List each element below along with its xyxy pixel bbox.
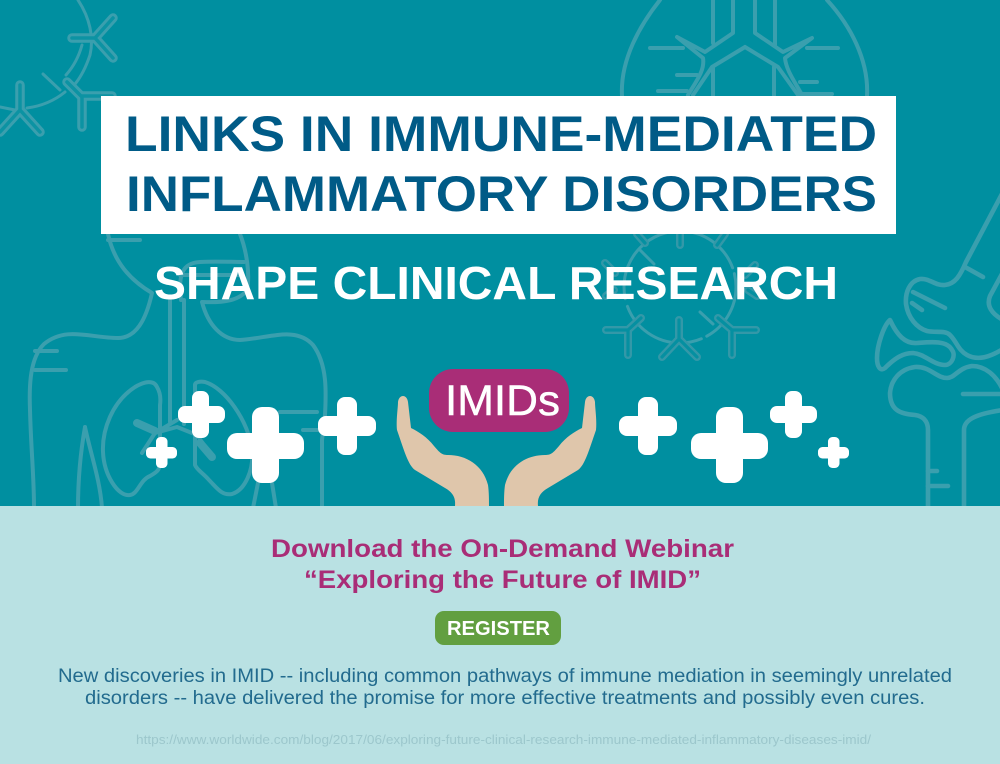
IMIDs badge xyxy=(429,369,569,432)
right crosses xyxy=(619,391,849,483)
source url: https://www.worldwide.com/blog/2017/06/exploring-future-clinical-research-immune-mediated-inflammatory-diseases-imid/ xyxy=(136,733,872,747)
icon: human torso with lungs xyxy=(30,234,326,508)
teal header background xyxy=(0,0,1000,506)
register button xyxy=(435,611,561,645)
icon: antibodies top left xyxy=(0,0,113,132)
description text: New discoveries in IMID -- including common pathways of immune mediation in seemingly unrelated xyxy=(58,666,952,687)
webinar heading: Download the On-Demand Webinar xyxy=(271,535,734,563)
description text: disorders -- have delivered the promise for more effective treatments and possibly even cures. xyxy=(85,688,925,709)
subtitle: SHAPE CLINICAL RESEARCH xyxy=(154,257,838,309)
icon: lungs top right xyxy=(622,0,867,96)
title text: LINKS IN IMMUNE-MEDIATED xyxy=(125,106,877,162)
webinar heading xyxy=(271,535,734,594)
webinar heading: “Exploring the Future of IMID” xyxy=(304,566,701,594)
register button: REGISTER xyxy=(447,618,551,640)
title box xyxy=(101,96,896,234)
title box: INFLAMMATORY DISORDERS xyxy=(126,166,877,222)
description text xyxy=(58,666,952,709)
icon: right hand xyxy=(504,396,596,506)
icon: left hand xyxy=(397,396,489,506)
icon: virus with antibodies xyxy=(605,231,757,357)
left crosses xyxy=(146,391,376,483)
light footer panel xyxy=(0,506,1000,764)
icon: knee joint xyxy=(877,192,1000,510)
IMIDs badge: IMIDs xyxy=(445,377,560,425)
